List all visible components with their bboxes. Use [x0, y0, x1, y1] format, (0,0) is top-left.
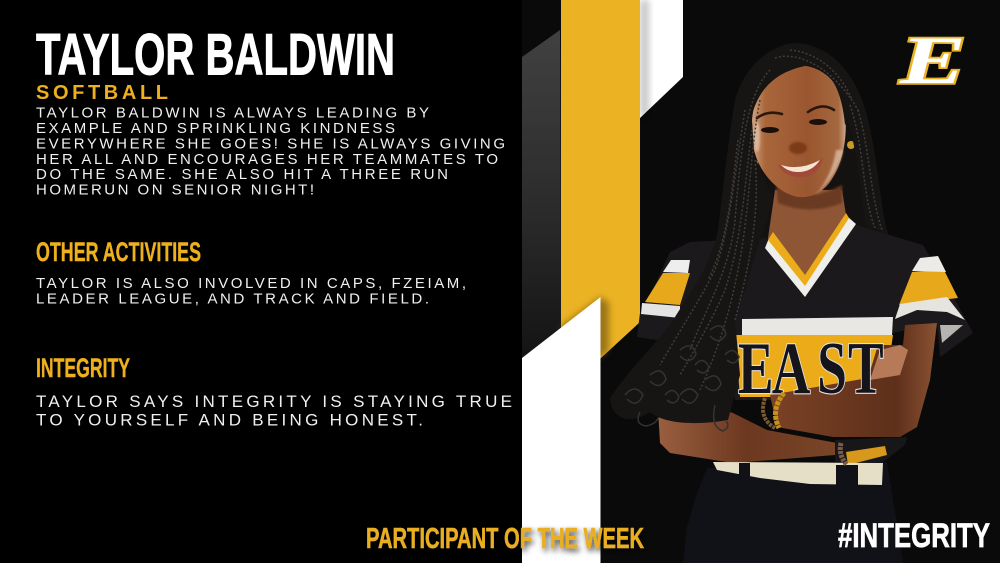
panel: white top angled stripe	[640, 0, 683, 118]
jersey white stripe	[742, 317, 893, 335]
title: TAYLOR BALDWIN	[36, 22, 395, 88]
EAST lettering: EAST	[738, 328, 884, 409]
text block: description: EVERYWHERE SHE GOES! SHE IS ALWAYS GIVING	[36, 136, 505, 152]
belt loops	[739, 463, 858, 487]
stripe shadow on white band	[640, 0, 649, 116]
nose	[789, 142, 807, 154]
text block: description: DO THE SAME. SHE ALSO HIT A THREE RUN	[36, 166, 448, 183]
hand	[870, 345, 908, 380]
text block: description: HOMERUN ON SENIOR NIGHT!	[36, 182, 314, 198]
right hair side	[825, 52, 888, 235]
pants	[683, 462, 903, 563]
back hair	[735, 43, 888, 240]
panel: white lower angled stripe	[522, 297, 600, 563]
bracelets	[763, 393, 847, 465]
front hair	[610, 43, 860, 423]
footer label: PARTICIPANT OF THE WEEK	[366, 523, 644, 555]
neck	[768, 190, 846, 283]
text block: activities: TAYLOR IS ALSO INVOLVED IN CAPS, FZEIAM,	[36, 275, 466, 292]
hair curls	[625, 326, 739, 431]
text block: integrity: TO YOURSELF AND BEING HONEST.	[36, 410, 423, 430]
subtitle: sport: SOFTBALL	[36, 82, 168, 104]
text block: integrity	[36, 392, 512, 430]
right sleeve stripes	[895, 256, 965, 343]
jersey gold panel	[735, 335, 893, 397]
eyes	[761, 119, 827, 133]
heading: other activities: OTHER ACTIVITIES	[36, 237, 201, 267]
braid strands	[660, 50, 882, 390]
text block: activities: LEADER LEAGUE, AND TRACK AND FIELD.	[36, 290, 429, 308]
face highlights	[754, 122, 843, 196]
text block: description: HER ALL AND ENCOURAGES HER TEAMMATES TO	[36, 151, 498, 168]
heading: integrity: INTEGRITY	[36, 353, 130, 383]
text block: description: TAYLOR BALDWIN IS ALWAYS LEADING BY	[36, 104, 429, 122]
earrings	[752, 141, 855, 166]
jersey	[637, 217, 973, 400]
face	[752, 65, 846, 197]
collar V	[765, 217, 856, 297]
smile	[778, 158, 823, 177]
forearm lower	[657, 393, 837, 463]
belt	[713, 462, 883, 485]
panel: gold vertical stripe	[561, 0, 640, 358]
panel: dark grey angled stripe	[522, 30, 561, 368]
photo: softball player	[610, 43, 973, 563]
text block: integrity: TAYLOR SAYS INTEGRITY IS STAYING TRUE	[36, 392, 512, 411]
icon: E logo: E	[899, 22, 966, 98]
neck shadow	[776, 185, 842, 210]
brows	[757, 106, 834, 118]
shadow of white lower stripe on gold	[561, 297, 609, 358]
jersey hem	[835, 437, 907, 462]
forearm upper and hand	[770, 323, 937, 437]
text block: description: EXAMPLE AND SPRINKLING KINDNESS	[36, 120, 395, 137]
text block: activities	[36, 275, 466, 308]
left sleeve stripes	[641, 260, 690, 318]
text block: description	[36, 104, 505, 198]
